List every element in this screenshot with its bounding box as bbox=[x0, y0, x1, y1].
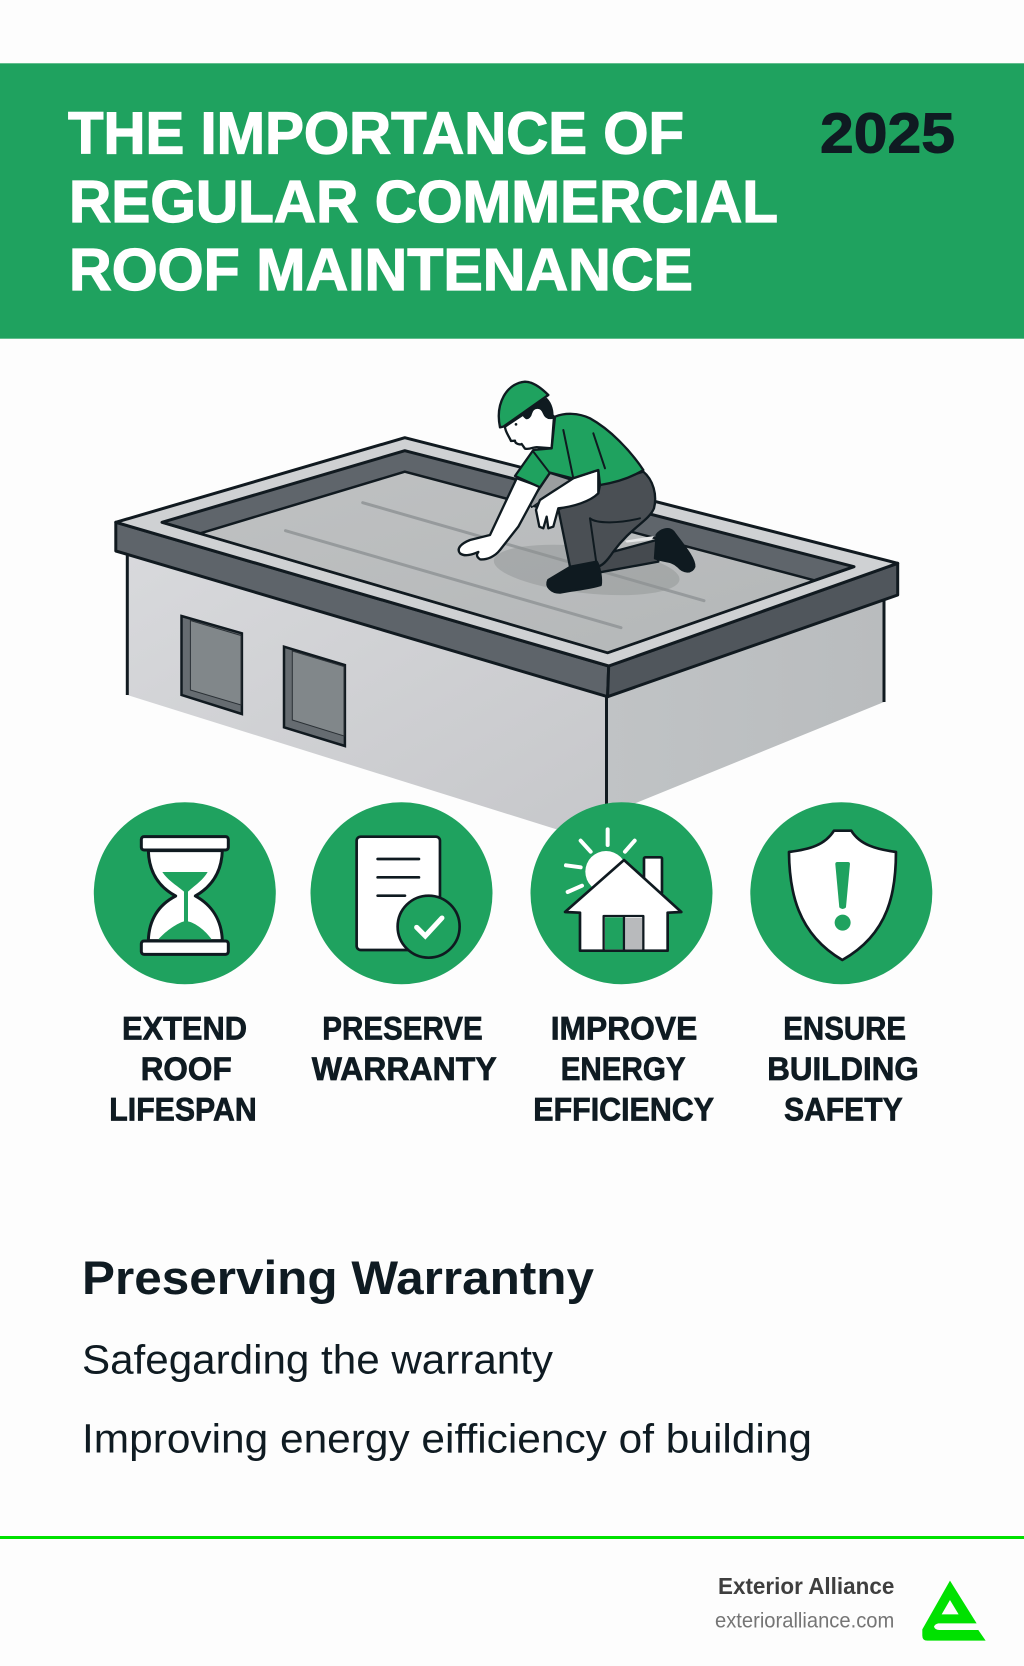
icon: house with sun bbox=[530, 802, 712, 984]
label bbox=[533, 1010, 714, 1128]
label: LIFESPAN bbox=[109, 1092, 257, 1128]
icon: shield with exclamation bbox=[750, 802, 932, 984]
label: EXTEND bbox=[122, 1010, 247, 1046]
footer rule bbox=[0, 1536, 1024, 1539]
label: BUILDING bbox=[767, 1051, 919, 1087]
label: IMPROVE bbox=[551, 1010, 697, 1046]
year: 2025 bbox=[820, 102, 955, 166]
brand url: exterioralliance.com bbox=[715, 1609, 894, 1632]
roof fascia bbox=[116, 522, 898, 697]
benefit: preserve warranty bbox=[310, 802, 497, 1087]
logo bbox=[922, 1581, 986, 1641]
windows bbox=[182, 616, 345, 746]
roof seams bbox=[286, 503, 704, 628]
label bbox=[109, 1010, 257, 1128]
label: EFFICIENCY bbox=[533, 1092, 714, 1128]
title: REGULAR COMMERCIAL bbox=[69, 168, 778, 235]
label: SAFETY bbox=[784, 1092, 903, 1128]
label: ENERGY bbox=[561, 1051, 686, 1087]
label: ENSURE bbox=[783, 1010, 906, 1046]
label: PRESERVE bbox=[322, 1010, 483, 1046]
brand name: Exterior Alliance bbox=[718, 1573, 894, 1599]
panel: benefit icons and labels bbox=[94, 802, 932, 1128]
title bbox=[68, 99, 778, 303]
building walls bbox=[127, 552, 884, 845]
title: ROOF MAINTENANCE bbox=[69, 236, 693, 303]
label: WARRANTY bbox=[312, 1051, 497, 1087]
text block: preserving warranty bbox=[82, 1252, 812, 1462]
benefit: improve energy efficiency bbox=[530, 802, 714, 1128]
roof parapet top bbox=[116, 438, 898, 666]
label bbox=[767, 1010, 919, 1128]
body line two: Improving energy eifficiency of building bbox=[82, 1416, 812, 1462]
benefit: ensure building safety bbox=[750, 802, 932, 1128]
label bbox=[312, 1010, 497, 1087]
title: THE IMPORTANCE OF bbox=[68, 99, 684, 166]
parapet inner walls bbox=[162, 451, 854, 653]
heading: Preserving Warrantny bbox=[82, 1252, 595, 1305]
illustration: building with flat roof and worker bbox=[116, 382, 898, 845]
panel: header bbox=[0, 63, 1024, 339]
membrane outline bbox=[162, 472, 854, 653]
icon: document with check bbox=[310, 802, 492, 984]
worker bbox=[459, 382, 694, 603]
footer brand bbox=[715, 1573, 986, 1641]
label: ROOF bbox=[141, 1051, 232, 1087]
body line one: Safegarding the warranty bbox=[82, 1336, 554, 1382]
roof membrane bbox=[200, 472, 815, 653]
header band bbox=[0, 63, 1024, 339]
benefit: extend roof lifespan bbox=[94, 802, 276, 1128]
icon: hourglass bbox=[94, 802, 276, 984]
